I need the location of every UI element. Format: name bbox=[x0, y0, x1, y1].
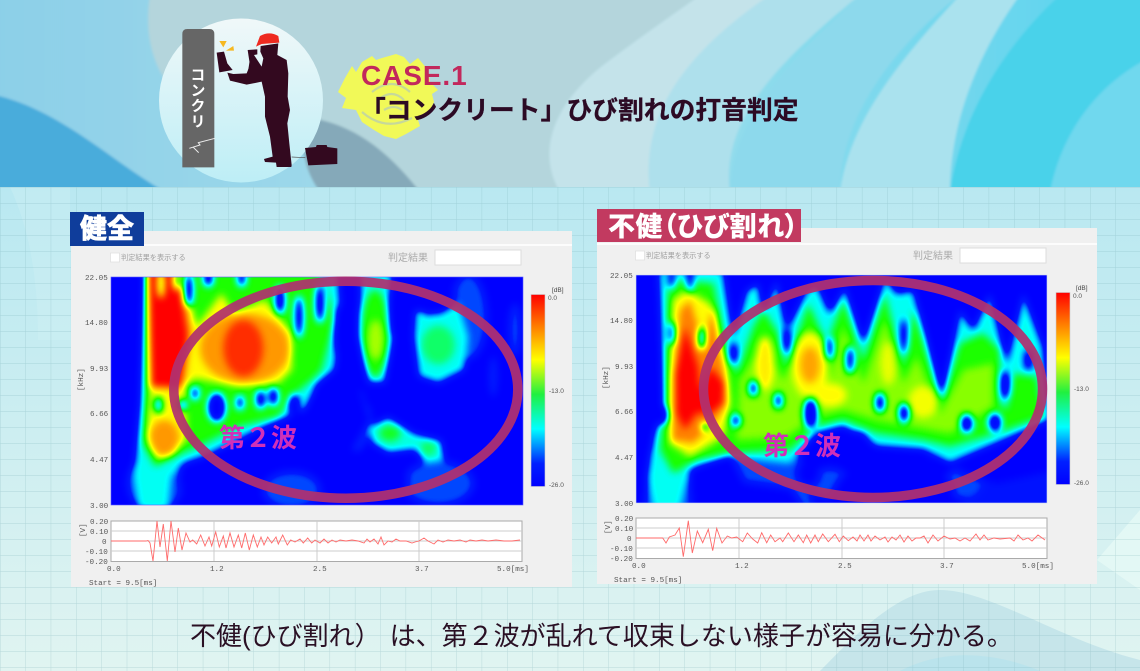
column label: コンクリ bbox=[188, 67, 206, 129]
healthy badge: 健全 bbox=[80, 214, 134, 244]
waveform: cracked bbox=[605, 516, 1054, 585]
waveform: healthy: 3.7 bbox=[415, 566, 429, 574]
cracked badge: 不健（ひび割れ） bbox=[608, 212, 799, 242]
waveform: cracked: 0.20 bbox=[615, 516, 634, 524]
frequency axis labels: 22.05 bbox=[610, 273, 633, 281]
case number: CASE.1 bbox=[361, 60, 468, 91]
waveform: cracked: 2.5 bbox=[838, 563, 852, 571]
holes bbox=[147, 277, 460, 492]
result controls: 判定結果を表示する bbox=[121, 253, 186, 262]
frequency axis labels: 6.66 bbox=[90, 411, 109, 419]
waveform: cracked: Start = 9.5[ms] bbox=[614, 577, 682, 585]
frequency axis labels: [kHz] bbox=[78, 368, 86, 391]
pale circle bbox=[159, 18, 323, 182]
frequency axis labels: 9.93 bbox=[615, 364, 634, 372]
waveform: cracked: 3.7 bbox=[940, 563, 954, 571]
plot border bbox=[111, 277, 523, 505]
result controls: 判定結果を表示する bbox=[646, 251, 711, 260]
waveform: cracked: [V] bbox=[605, 520, 613, 534]
colour scale bbox=[1056, 285, 1089, 487]
result controls bbox=[636, 248, 1046, 263]
waveform: cracked: 0.10 bbox=[615, 526, 634, 534]
cord bbox=[292, 156, 305, 159]
crack bbox=[189, 138, 215, 153]
panel background bbox=[597, 228, 1097, 584]
frequency axis labels: 6.66 bbox=[615, 409, 634, 417]
waveform: healthy: 0.20 bbox=[90, 519, 109, 527]
frequency axis labels: 9.93 bbox=[90, 366, 109, 374]
colour scale: [dB] bbox=[1076, 285, 1088, 292]
hammer handle bbox=[248, 53, 252, 75]
header band background bbox=[0, 0, 1140, 192]
worker silhouette bbox=[227, 43, 292, 167]
result controls: 判定結果 bbox=[913, 249, 953, 262]
frequency axis labels: 3.00 bbox=[615, 501, 634, 509]
red hard hat bbox=[256, 33, 279, 47]
heading: 「コンクリート」ひび割れの打音判定 bbox=[360, 96, 799, 125]
panel background bbox=[71, 231, 572, 587]
yellow brush splash bbox=[338, 54, 438, 139]
frequency axis labels: 14.80 bbox=[85, 320, 108, 328]
illustration: worker striking concrete bbox=[159, 18, 337, 182]
waveform: healthy: 2.5 bbox=[313, 566, 327, 574]
colour scale: -26.0 bbox=[1074, 480, 1089, 487]
highlight ellipse: second wave bbox=[704, 280, 1042, 498]
waveform: healthy: 0.0 bbox=[107, 566, 121, 574]
label: second wave: 第２波 bbox=[763, 431, 841, 461]
waveform: cracked: -0.20 bbox=[610, 556, 633, 564]
colour scale: -13.0 bbox=[1074, 386, 1089, 393]
waveform: healthy: -0.20 bbox=[85, 559, 108, 567]
panel: cracked bbox=[597, 228, 1097, 585]
colour scale bbox=[531, 287, 564, 489]
label: second wave: 第２波 bbox=[219, 423, 297, 453]
waveform: healthy: Start = 9.5[ms] bbox=[89, 580, 157, 588]
spectrogram: healthy bbox=[111, 277, 523, 505]
colour scale: -26.0 bbox=[549, 482, 564, 489]
colour scale: -13.0 bbox=[549, 388, 564, 395]
plot border bbox=[636, 275, 1047, 503]
holes bbox=[656, 268, 1057, 510]
waveform: healthy: 5.0[ms] bbox=[497, 566, 529, 574]
caption: 不健(ひび割れ） は、第２波が乱れて収束しない様子が容易に分かる。 bbox=[190, 621, 1013, 651]
colour scale: 0.0 bbox=[548, 295, 557, 302]
highlight ellipse: second wave bbox=[174, 281, 518, 498]
spectrogram: cracked bbox=[636, 275, 1047, 503]
waveform: cracked: 0 bbox=[627, 536, 632, 544]
waveform: cracked: 1.2 bbox=[735, 563, 749, 571]
frequency axis labels: 22.05 bbox=[85, 275, 108, 283]
title bbox=[360, 60, 799, 125]
healthy badge bbox=[70, 212, 144, 246]
waveform: healthy: 1.2 bbox=[210, 566, 224, 574]
frequency axis labels bbox=[78, 275, 109, 511]
waveform: healthy bbox=[80, 519, 529, 588]
frequency axis labels: 4.47 bbox=[90, 457, 108, 465]
frequency axis labels: 14.80 bbox=[610, 318, 633, 326]
frequency axis labels: [kHz] bbox=[603, 366, 611, 389]
result controls bbox=[110, 250, 521, 265]
frequency axis labels bbox=[603, 273, 634, 509]
panel: healthy bbox=[71, 231, 572, 588]
impact sparks bbox=[219, 41, 234, 51]
waveform: healthy: 0.10 bbox=[90, 529, 109, 537]
result controls: 判定結果 bbox=[388, 251, 428, 264]
frequency axis labels: 4.47 bbox=[615, 455, 633, 463]
waveform: healthy: [V] bbox=[80, 523, 88, 537]
concrete column bbox=[182, 29, 214, 167]
frequency axis labels: 3.00 bbox=[90, 503, 109, 511]
waveform: healthy: 0 bbox=[102, 539, 107, 547]
colour scale: [dB] bbox=[552, 287, 564, 294]
tool box bbox=[305, 145, 337, 165]
waveform: cracked: -0.10 bbox=[610, 546, 633, 554]
colour scale: 0.0 bbox=[1073, 293, 1082, 300]
waveform: cracked: 0.0 bbox=[632, 563, 646, 571]
chisel bbox=[217, 52, 233, 72]
waveform: healthy: -0.10 bbox=[85, 549, 108, 557]
lower background with grid bbox=[0, 187, 1140, 671]
waveform: cracked: 5.0[ms] bbox=[1022, 563, 1054, 571]
